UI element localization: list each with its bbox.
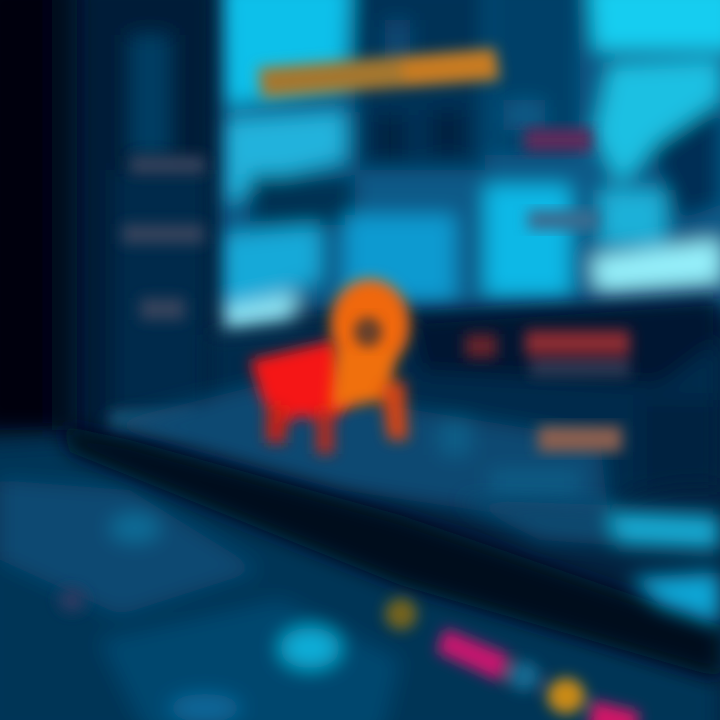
bottom colour chips bbox=[58, 588, 640, 720]
dark block: right mosaic bbox=[650, 105, 720, 220]
chip: dim magenta bbox=[58, 588, 86, 612]
panel: upper screen bbox=[215, 0, 720, 335]
cyan block: above highlight bbox=[600, 190, 665, 245]
tan label: lower right bbox=[538, 426, 622, 452]
cyan block: right mosaic bbox=[595, 60, 720, 185]
figure: red body bbox=[250, 340, 350, 454]
dark block: left middle bbox=[250, 175, 355, 225]
cyan block: top right bbox=[590, 0, 720, 50]
sidebar text blobs bbox=[110, 156, 205, 432]
dark column: top centre bbox=[355, 0, 485, 170]
cyan block: left middle bbox=[225, 112, 345, 205]
floor glow: upper left bbox=[0, 480, 260, 615]
dark strip: beneath screen bbox=[410, 298, 720, 385]
chip: olive circle bbox=[385, 598, 417, 630]
floor glow: lower bbox=[100, 600, 400, 720]
red text blobs: right of figure bbox=[465, 330, 630, 376]
dark column: top right bbox=[490, 0, 580, 155]
cyan block: lower centre right bbox=[485, 185, 570, 295]
chip: amber circle bbox=[547, 678, 585, 714]
blue spot: bottom bbox=[169, 694, 241, 720]
right cyan bars bbox=[460, 500, 720, 625]
chip: magenta bar bbox=[436, 628, 510, 682]
cyan highlight: lower right bbox=[592, 240, 720, 290]
dark patch: right shelf bbox=[640, 400, 720, 485]
cyan block: lower centre bbox=[345, 215, 455, 300]
magenta label: upper right bbox=[524, 128, 592, 152]
figure: orange head bbox=[330, 279, 410, 440]
panel: lower floor bbox=[0, 440, 720, 720]
chip: teal circle bbox=[508, 661, 540, 691]
mottling: shelf bbox=[440, 420, 470, 455]
figure: face centre bbox=[354, 317, 382, 347]
pale highlight: lower left bbox=[220, 292, 295, 335]
sidebar lower glow bbox=[115, 170, 205, 410]
cyan block: lower left bbox=[222, 225, 320, 310]
cyan spot: floor bbox=[280, 628, 340, 668]
panel: left sidebar bbox=[75, 0, 215, 450]
grey label: right middle bbox=[528, 210, 598, 230]
dark diagonal band bbox=[60, 425, 720, 678]
shelf glow bbox=[100, 385, 610, 530]
illustration: orange and red figure bbox=[250, 279, 410, 454]
mottling: dark patches bbox=[375, 115, 405, 160]
blue spot: floor bbox=[110, 514, 160, 542]
sidebar column glow bbox=[130, 35, 170, 155]
panel: lower right shelf bbox=[100, 298, 720, 530]
panel: left dark edge bbox=[0, 0, 77, 430]
cyan block: top left bbox=[222, 0, 350, 105]
title bar: orange blur bbox=[258, 48, 500, 98]
chip: pink bar bbox=[588, 700, 640, 720]
